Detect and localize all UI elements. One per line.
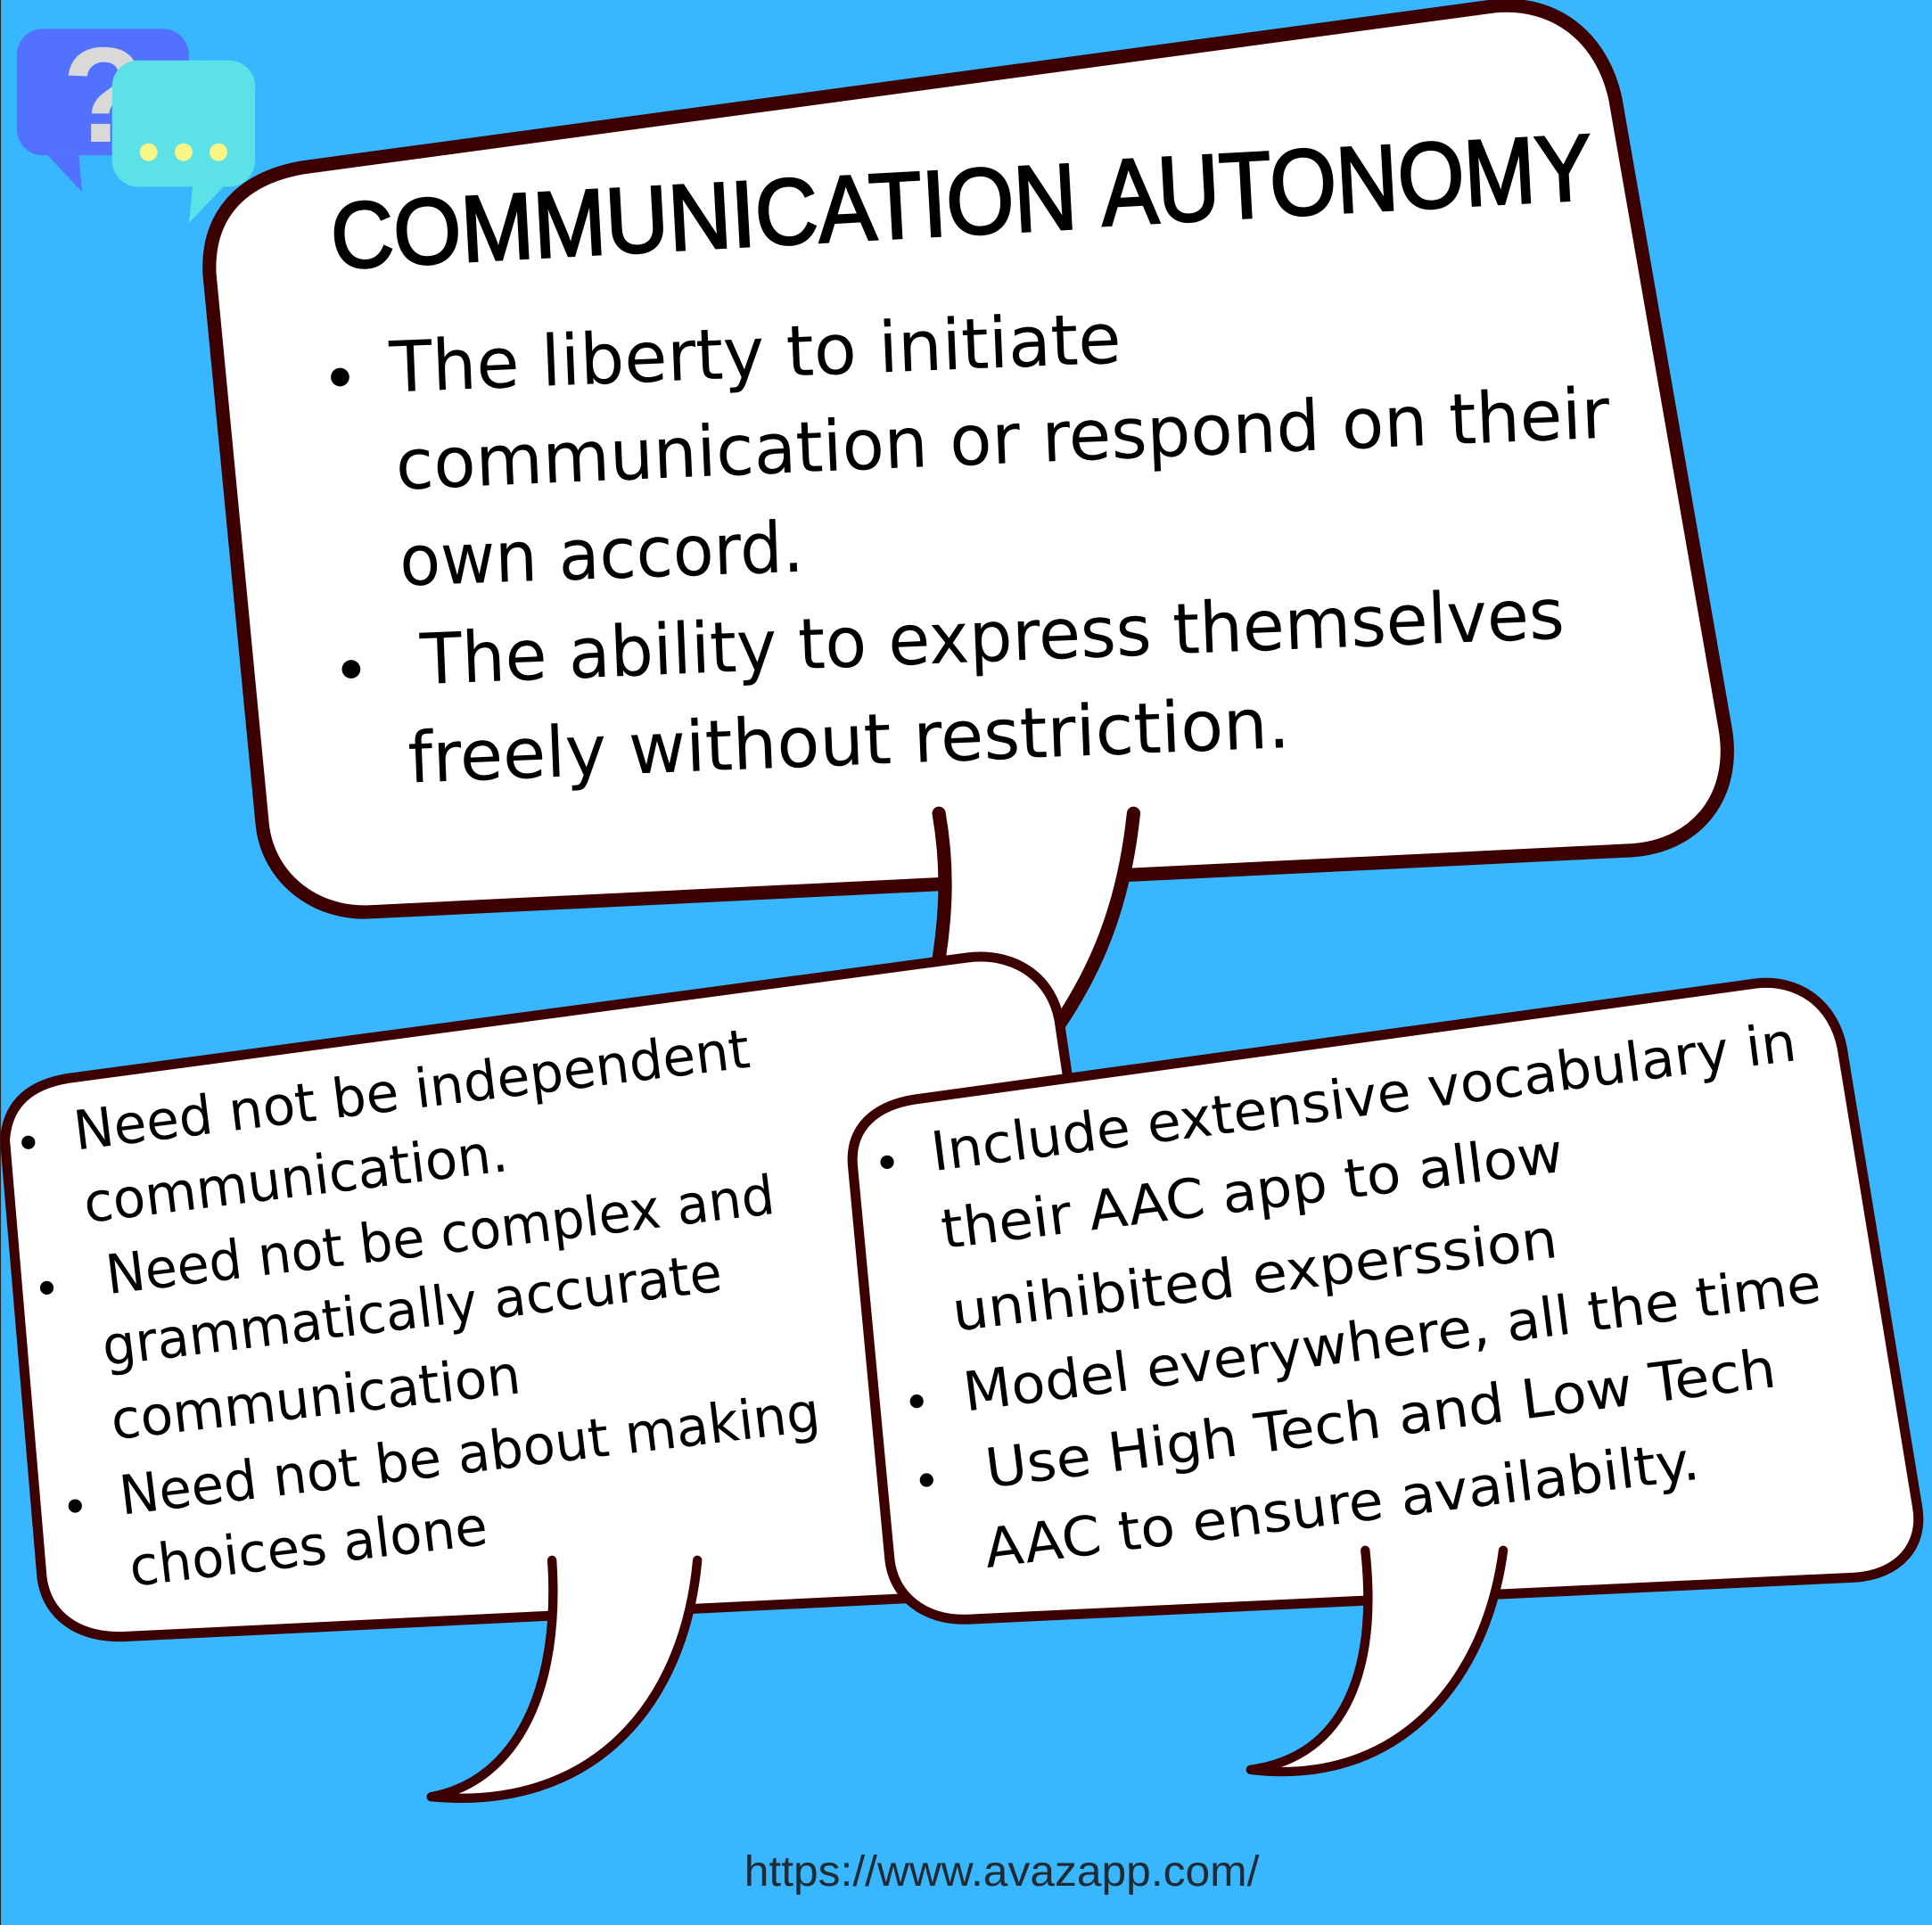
icon: question speech bubble xyxy=(17,20,189,192)
source url: https://www.avazapp.com/ xyxy=(744,1847,1260,1896)
text block: autonomy definition: communication or respond on their xyxy=(394,373,1612,506)
text block: autonomy definition: The liberty to initiate xyxy=(387,298,1122,409)
icon: ellipsis speech bubble xyxy=(112,61,255,223)
text block: right bullets: their AAC app to allow xyxy=(938,1123,1566,1262)
panel: AAC tips speech bubble xyxy=(852,983,1919,1772)
text block: left bullets: communication xyxy=(108,1345,523,1452)
icon: question speech bubble: ? xyxy=(62,20,145,171)
text block: autonomy definition: freely without restriction. xyxy=(407,682,1291,800)
text block: right bullets: AAC to ensure availabilty. xyxy=(981,1430,1703,1581)
text block: autonomy definition: own accord. xyxy=(399,506,805,603)
text block: left bullets xyxy=(21,1018,823,1600)
heading: COMMUNICATION xyxy=(328,144,1080,289)
text block: left bullets: Need not be complex and xyxy=(103,1164,778,1307)
panel: what communication need not be speech bubble xyxy=(5,957,1109,1798)
panel: communication autonomy speech bubble xyxy=(210,5,1727,1060)
heading: AUTONOMY xyxy=(1098,115,1595,246)
text block: right bullets: unihibited experssion xyxy=(949,1208,1561,1345)
text block: left bullets: grammatically accurate xyxy=(99,1242,726,1378)
text block: right bullets: Use High Tech and Low Tech xyxy=(982,1337,1780,1501)
text block: autonomy definition xyxy=(331,298,1612,800)
text block: right bullets: Include extensive vocabulary in xyxy=(928,1011,1800,1184)
heading xyxy=(328,115,1595,289)
text block: right bullets xyxy=(880,1011,1824,1581)
text block: left bullets: Need not be about making xyxy=(116,1381,823,1528)
text block: right bullets: Model everywhere, all the time xyxy=(960,1253,1824,1425)
text block: left bullets: choices alone xyxy=(126,1495,490,1600)
text block: left bullets: Need not be independent xyxy=(70,1018,753,1163)
text block: left bullets: communication. xyxy=(80,1122,511,1236)
text block: autonomy definition: The ability to express themselves xyxy=(418,573,1566,701)
